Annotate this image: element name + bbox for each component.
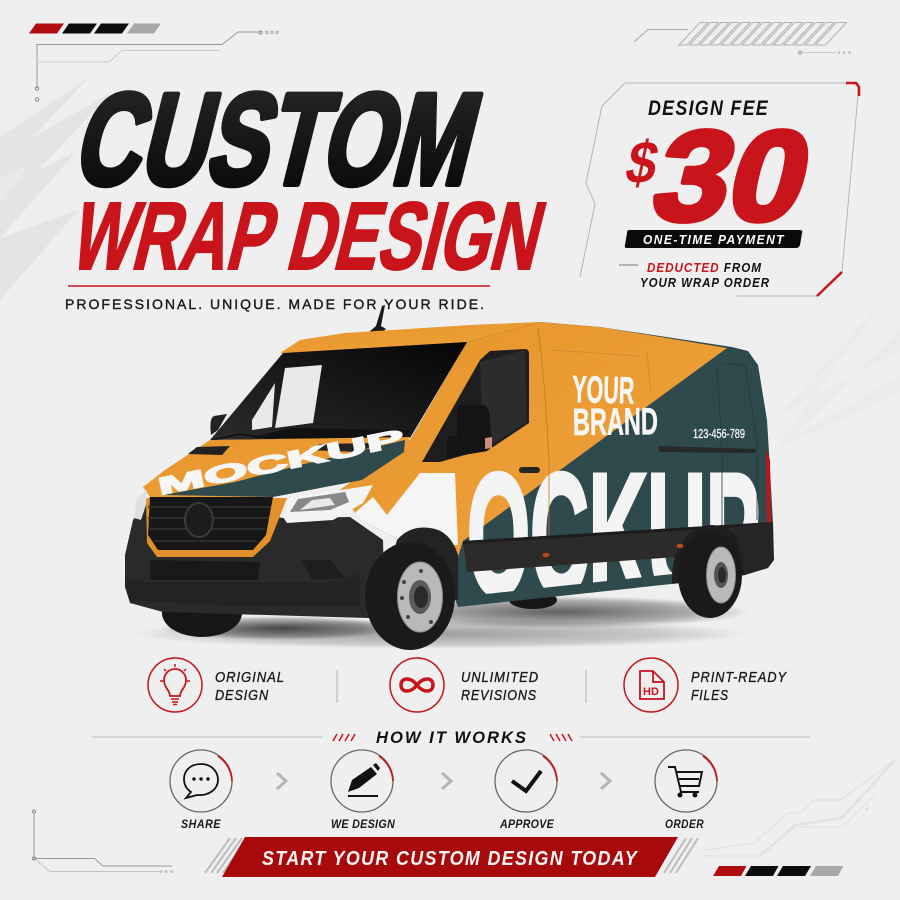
door mirror left (210, 414, 227, 435)
wiper (212, 434, 360, 440)
label: REVISIONS (461, 688, 537, 704)
heading text: HOW IT WORKS (376, 728, 528, 747)
icon: shopping cart (655, 750, 717, 812)
feature: print-ready files (624, 658, 787, 712)
rear wheel (678, 532, 742, 618)
heading: how it works (92, 728, 810, 747)
windshield (210, 342, 467, 440)
panel seams (538, 328, 757, 540)
left stripes (205, 838, 247, 873)
label: DESIGN (215, 688, 269, 704)
step: order (655, 750, 717, 831)
van ground shadow (130, 596, 750, 649)
orange grille surround (146, 498, 287, 557)
red ticks (333, 734, 572, 741)
label: ORIGINAL (215, 670, 285, 686)
left headlight (134, 490, 147, 520)
top left tech lines (35, 31, 278, 101)
van illustration (125, 305, 790, 650)
top right tech hatch (634, 22, 851, 54)
call to action banner (205, 837, 698, 877)
roof (280, 322, 600, 353)
label (461, 670, 539, 704)
orange wrap area (340, 322, 727, 560)
far wheels (162, 589, 557, 637)
label: PRINT-READY (691, 670, 787, 686)
your brand text (572, 369, 658, 444)
divider right (585, 670, 587, 703)
step label: ORDER (665, 817, 704, 831)
banner text: START YOUR CUSTOM DESIGN TODAY (262, 848, 638, 870)
one-time payment pill: ONE-TIME PAYMENT (643, 233, 785, 247)
step: approve (495, 750, 557, 831)
lower intake (150, 560, 260, 580)
icon: light bulb (148, 658, 202, 712)
decorative swooshes left (0, 78, 112, 300)
hood green wrap (163, 440, 405, 497)
banner shape (222, 837, 678, 877)
your brand text: BRAND (573, 401, 658, 444)
deducted note (619, 261, 770, 290)
dollar sign: $ (620, 129, 665, 196)
icon: hd file: HD (643, 686, 659, 698)
bumper (125, 497, 385, 618)
label: FILES (691, 688, 729, 704)
icon: check mark (495, 750, 557, 812)
feature: unlimited revisions (390, 658, 539, 712)
step label: WE DESIGN (331, 817, 395, 831)
grille (148, 497, 273, 550)
wing mirror (447, 405, 492, 458)
decorative swooshes right (770, 292, 900, 450)
arrow (442, 773, 451, 789)
rear door rail (659, 446, 756, 453)
side window (422, 349, 529, 462)
right headlight (283, 485, 373, 523)
hood mockup lettering: MOCKUP (156, 425, 406, 501)
white fender letter (350, 473, 458, 545)
rear wheel arch (672, 525, 746, 584)
feature: original design (148, 658, 285, 712)
label (215, 670, 285, 704)
title line: custom: CUSTOM (64, 67, 494, 212)
title line: wrap design: WRAP DESIGN (63, 182, 556, 290)
white m lower fender arch (380, 528, 458, 600)
rear bumper (735, 522, 774, 575)
label: UNLIMITED (461, 670, 539, 686)
bumper lower crease (125, 574, 360, 606)
hood vents (188, 443, 378, 455)
side markers (542, 531, 765, 557)
right stripes (664, 838, 698, 873)
step: we design (331, 750, 395, 831)
bottom right colour bars (713, 866, 844, 876)
icon: speech bubble (170, 750, 232, 812)
phone number: 123-456-789 (693, 427, 745, 441)
bottom right tech lines (700, 760, 895, 856)
panel frame (580, 83, 859, 296)
deducted note: DEDUCTED FROM (647, 261, 762, 275)
label (691, 670, 787, 704)
van side panel (340, 322, 773, 607)
red underline (68, 285, 490, 287)
tagline: PROFESSIONAL. UNIQUE. MADE FOR YOUR RIDE. (65, 296, 486, 312)
your brand text: YOUR (572, 369, 635, 413)
title (63, 67, 556, 290)
one-time payment pill (625, 230, 802, 248)
side rub strip (463, 522, 773, 572)
price: 30 (640, 104, 826, 248)
icon: infinity (390, 658, 444, 712)
door handle (519, 467, 540, 473)
design fee label: DESIGN FEE (648, 97, 769, 120)
arrow (277, 773, 286, 789)
panel: design fee (580, 83, 859, 296)
tail light (766, 450, 771, 523)
top left colour bars (29, 24, 161, 34)
deducted note: YOUR WRAP ORDER (640, 276, 770, 290)
hood (143, 437, 410, 497)
step label: SHARE (181, 817, 221, 831)
front wheel (365, 542, 455, 650)
icon: pencil (331, 750, 393, 812)
icon: hd file (624, 658, 678, 712)
step: share (170, 750, 232, 831)
divider left (336, 670, 338, 703)
step label: APPROVE (499, 817, 555, 831)
bottom left tech lines (32, 810, 173, 873)
antenna (369, 305, 386, 334)
arrow (601, 773, 610, 789)
